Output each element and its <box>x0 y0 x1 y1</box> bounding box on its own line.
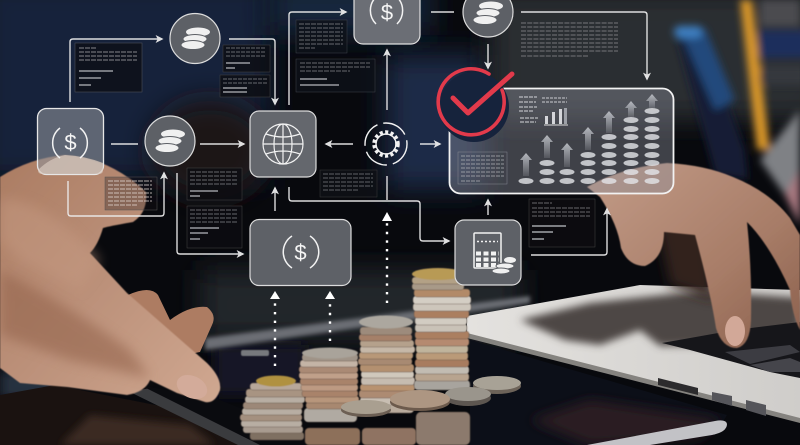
free text block at top right <box>521 23 618 56</box>
text panel 8 <box>320 170 377 197</box>
text panel 7 <box>187 206 242 248</box>
dollar box, top: $ <box>381 0 393 25</box>
background: blurred books and pencil <box>674 0 800 225</box>
text panel 6 <box>187 168 242 200</box>
dollar box, top <box>354 0 420 44</box>
wide dollar box: $ <box>294 240 307 265</box>
coin stack A <box>240 376 306 440</box>
coin columns <box>518 108 660 184</box>
text panel 3 <box>220 75 270 97</box>
small gray port on back edge <box>241 350 269 356</box>
left hand pointing <box>0 155 220 404</box>
mini bar chart <box>519 97 568 125</box>
text block inside panel <box>458 152 507 184</box>
laptop <box>467 285 800 423</box>
dollar box, left <box>38 108 104 174</box>
coin stack D <box>412 268 471 445</box>
coin stack B <box>299 348 360 445</box>
dollar box, left: $ <box>64 130 77 155</box>
dotted arrows from coins <box>270 212 392 366</box>
tablet and table surface <box>0 340 727 445</box>
text panel 9, under the thumb <box>105 177 157 210</box>
growth arrows <box>520 94 658 176</box>
wide dollar box <box>250 220 351 286</box>
globe box <box>250 111 316 177</box>
text panel 1 <box>75 43 142 92</box>
coin stack C <box>358 316 416 445</box>
text panel 4 <box>296 20 347 53</box>
gear cycle icon <box>365 123 407 165</box>
coin circle, top <box>170 14 220 64</box>
text panel 5 <box>296 59 375 92</box>
connector lines and arrows <box>68 12 647 255</box>
coin circle, top right <box>463 0 513 37</box>
text panel 12 <box>529 199 595 247</box>
coin circle, middle <box>145 116 195 166</box>
text panel 2 <box>223 45 270 72</box>
calculator box <box>455 220 521 285</box>
right hand typing <box>587 163 800 348</box>
laptop back edge in the background <box>205 296 530 350</box>
chart panel <box>450 88 674 194</box>
red check mark badge <box>438 69 512 142</box>
loose coins <box>341 376 521 417</box>
